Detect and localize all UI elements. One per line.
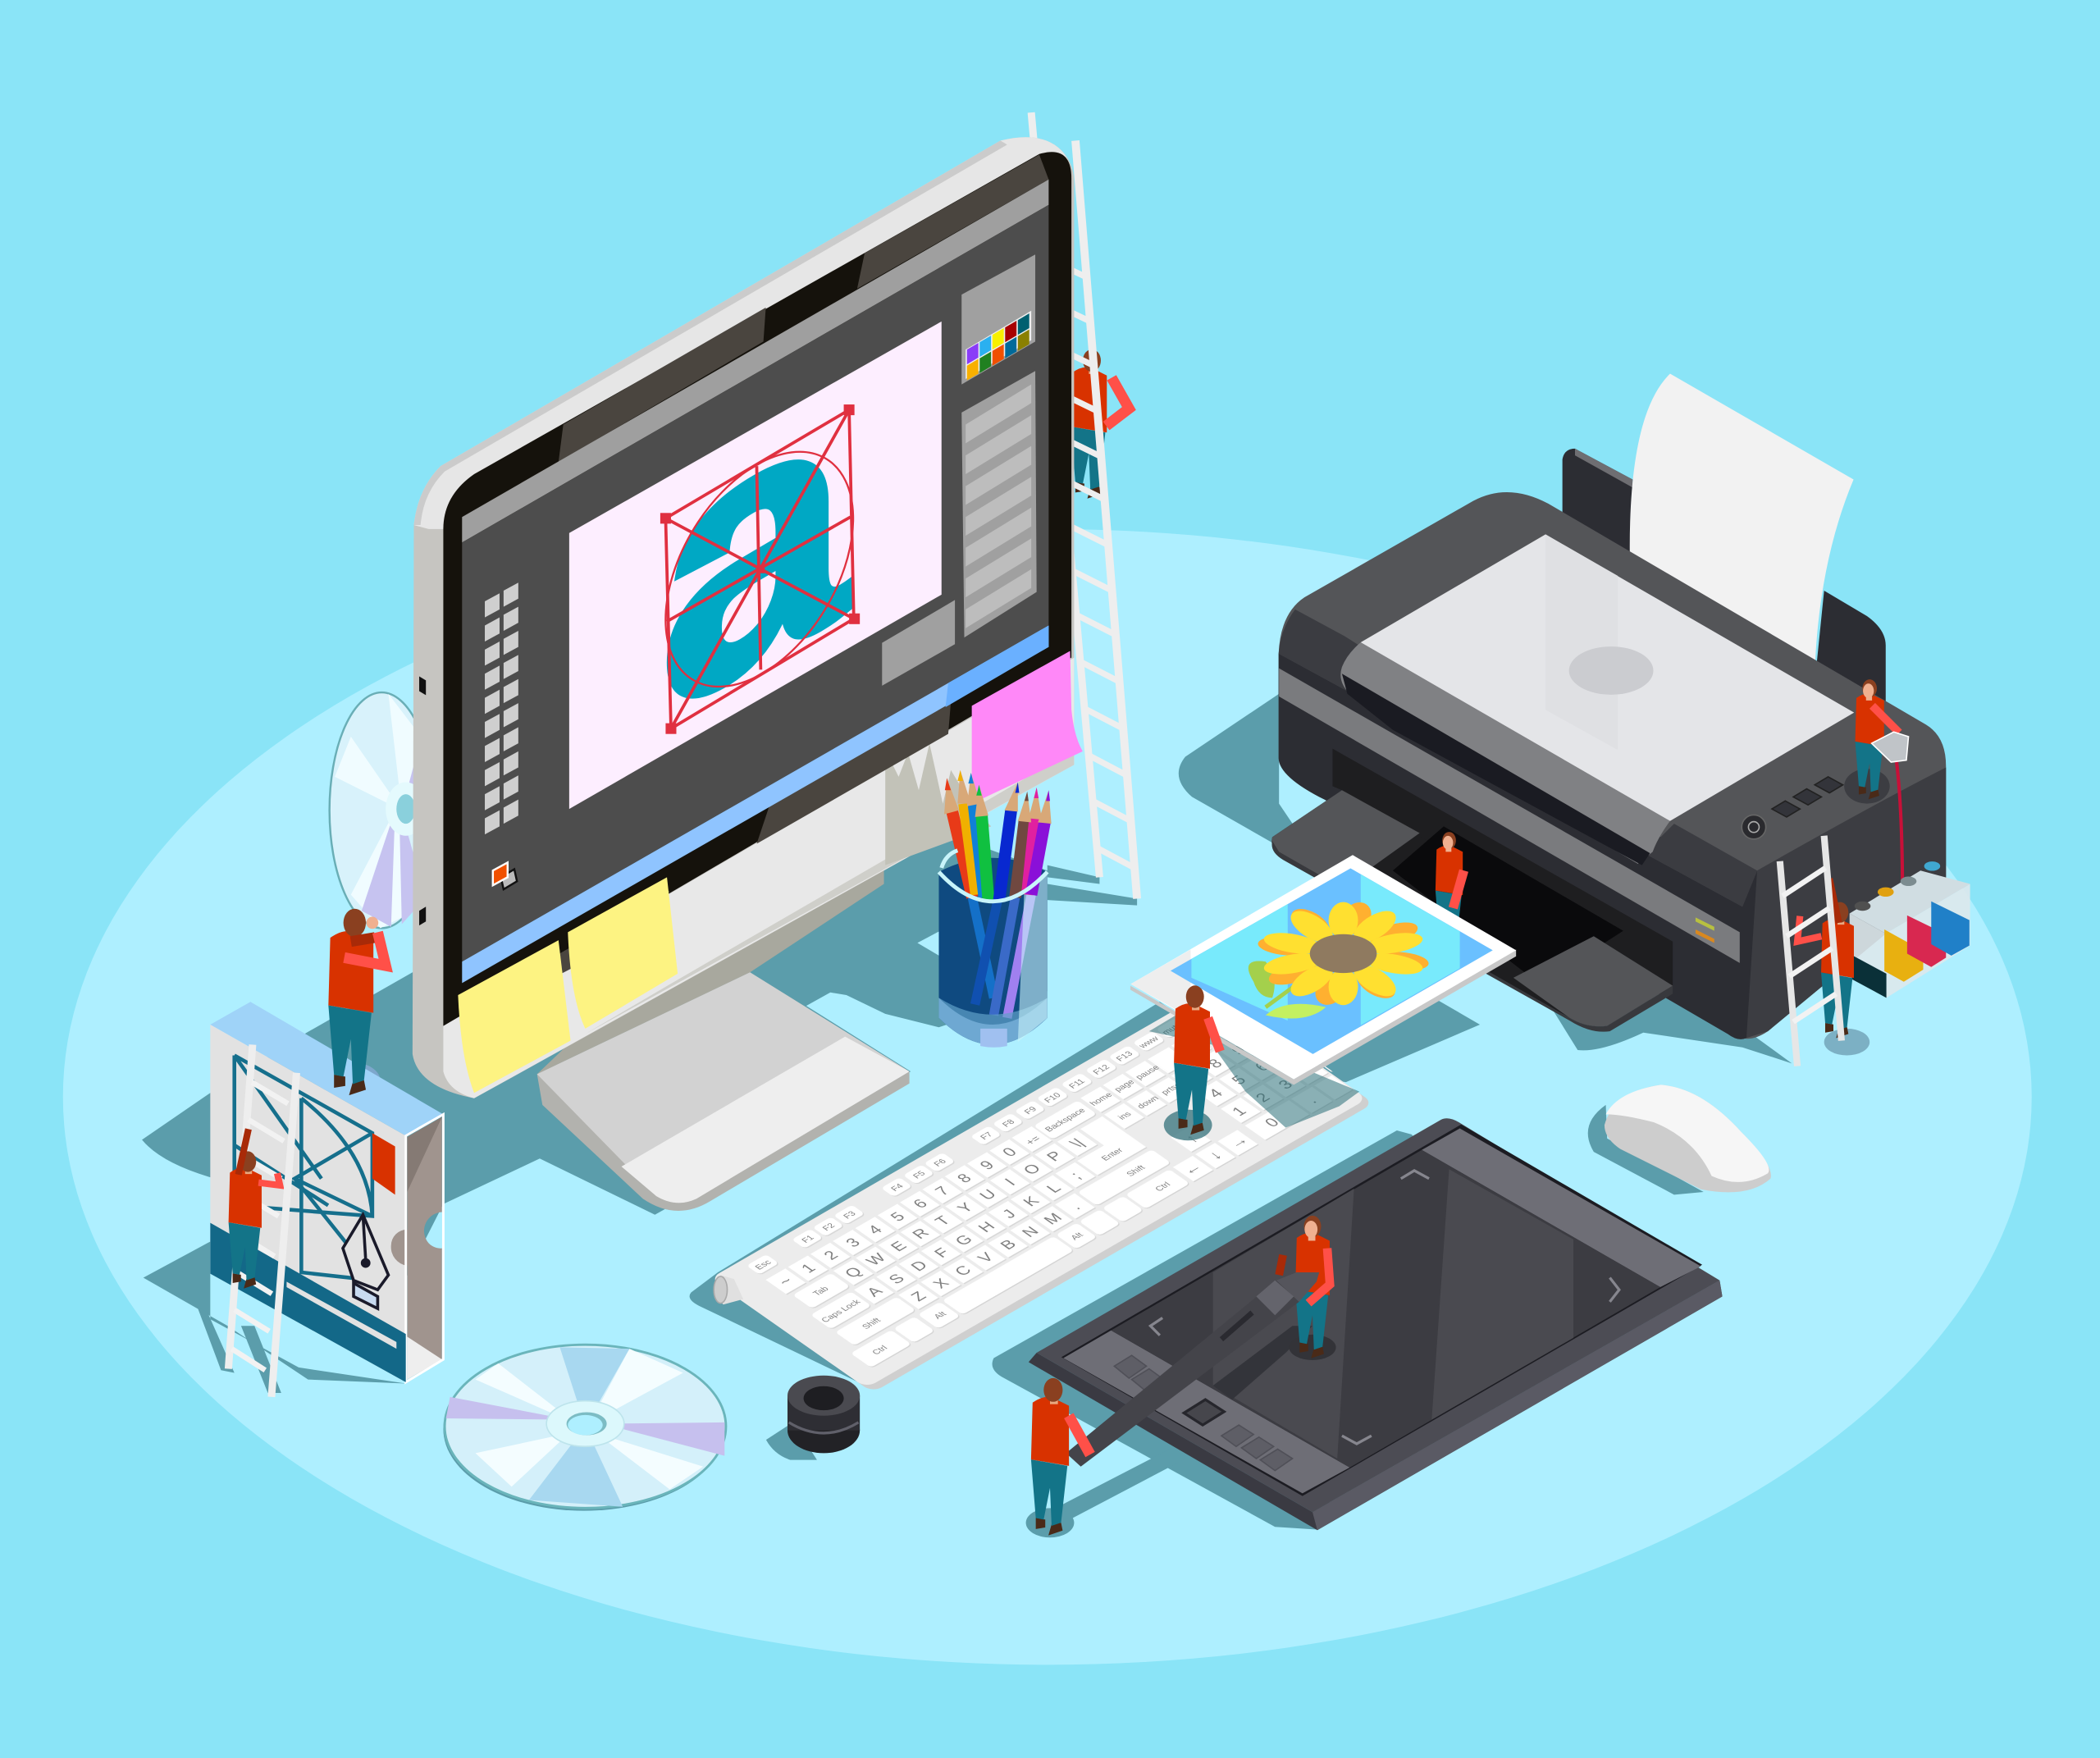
ink stream (1897, 760, 1902, 880)
pencils in cup (972, 895, 1031, 1018)
person on printer ladder (1797, 879, 1869, 1056)
key labels: prtsc (1160, 1082, 1184, 1097)
key labels (749, 1021, 1304, 1358)
paper support right (1815, 591, 1886, 710)
corner marks (1150, 1171, 1619, 1444)
output tray (1271, 790, 1673, 1026)
person standing on box (328, 909, 386, 1095)
keyboard: ↑ (1181, 1132, 1203, 1146)
stylus pen (1066, 1272, 1319, 1467)
keyboard: 9 (1227, 1043, 1250, 1057)
box stripe (210, 1223, 406, 1382)
keyboard: 4 (864, 1222, 887, 1237)
printer dark top band (1279, 610, 1757, 906)
key labels: page (1113, 1079, 1137, 1094)
keyboard: = (1303, 1066, 1319, 1076)
keyboard: V (974, 1250, 998, 1266)
lens cap (788, 1376, 860, 1453)
pen shadow on tablet (1213, 1326, 1312, 1400)
photo shadow on keyboard (1149, 1016, 1359, 1128)
tablet edge (1029, 1281, 1723, 1530)
keyboard: E (887, 1239, 911, 1254)
tablet person arms (1279, 1249, 1330, 1304)
key labels: www (1137, 1035, 1162, 1050)
keyboard: ← (1178, 1160, 1207, 1178)
disc blue reflections (529, 1347, 629, 1507)
key labels: F7 (979, 1131, 995, 1141)
right glass (1018, 872, 1048, 1042)
CD reflections (335, 694, 431, 928)
ladder rungs (1044, 257, 1134, 868)
yellow ink (1884, 929, 1923, 982)
keyboard: S (885, 1272, 909, 1287)
key labels: F11 (1067, 1078, 1088, 1090)
photo print (1130, 855, 1516, 1084)
front trim (1279, 669, 1740, 963)
side slots (419, 676, 426, 925)
key labels: Ctrl (871, 1345, 890, 1356)
pencils (952, 804, 1044, 900)
sunflower petals (1260, 902, 1427, 1005)
power button (1742, 815, 1766, 839)
key labels: mute (1161, 1021, 1185, 1037)
printer side panel (1746, 768, 1946, 1038)
keyboard: 5 (1228, 1073, 1250, 1088)
cup back (938, 858, 1048, 1044)
tablet top (1037, 1118, 1719, 1512)
key labels: Enter (1100, 1147, 1125, 1162)
pen nib icon (343, 1215, 388, 1308)
keyboard: F (930, 1245, 954, 1261)
pencil leads (945, 779, 951, 790)
printer body (1279, 492, 1946, 1039)
monitor chin (443, 658, 1074, 1098)
key labels: Alt (1070, 1231, 1085, 1242)
pencil cup (938, 770, 1052, 1048)
photo sky (1171, 868, 1493, 1054)
key labels: home (1089, 1091, 1115, 1107)
blue ink (1931, 902, 1970, 956)
desk ellipse (63, 529, 2032, 1664)
pink sticky note (972, 651, 1083, 804)
yellow sticky note 2 (568, 877, 678, 1029)
keyboard: 4 (1205, 1086, 1227, 1101)
ladder left rail (1031, 112, 1099, 877)
keyboard: B (997, 1237, 1020, 1253)
tank caps (1855, 861, 1940, 911)
key labels: Shift (1125, 1164, 1148, 1178)
key labels: Caps Lock (820, 1299, 863, 1324)
red label (372, 1133, 395, 1194)
photo leaves (1249, 961, 1275, 998)
mouse (1605, 1084, 1771, 1192)
monitor housing (413, 137, 1074, 1098)
keyboard: A (863, 1284, 887, 1299)
person at printer output (1436, 832, 1463, 945)
book box (210, 1002, 443, 1382)
keyboard: Y (953, 1200, 978, 1216)
disc white reflections (476, 1349, 703, 1489)
person lifting pen (1026, 1378, 1090, 1537)
yellow sticky note 1 (458, 940, 571, 1093)
keyboard: 0 (1261, 1115, 1284, 1130)
keyboard: ↓ (1204, 1148, 1226, 1162)
light strips (1422, 1128, 1701, 1287)
keyboard: H (975, 1219, 999, 1235)
pink ink (1907, 916, 1946, 967)
cup base (938, 998, 1048, 1034)
keyboard roll edge (714, 1275, 743, 1304)
ink bucket (1872, 732, 1909, 762)
keyboard: ~ (774, 1274, 797, 1289)
keyboard: 9 (976, 1158, 998, 1172)
keyboard: M (1040, 1211, 1066, 1227)
key labels: Esc (754, 1259, 774, 1272)
stand neck (537, 857, 884, 1074)
key labels: Ctrl (1154, 1181, 1173, 1193)
keyboard: X (929, 1276, 953, 1291)
paper support left (1563, 449, 1632, 578)
person climbing monitor ladder (1071, 349, 1129, 499)
printer front face (1279, 654, 1757, 1039)
ladder on box front rail (272, 1073, 296, 1397)
tank tops (1850, 870, 1970, 934)
tablet (1029, 1118, 1723, 1530)
keyboard: += (1022, 1134, 1043, 1147)
keyboard: K (1020, 1194, 1043, 1209)
small panel (882, 600, 955, 686)
keyboard: L (1043, 1181, 1066, 1196)
key labels: F4 (890, 1183, 906, 1193)
person holding CD base (322, 1062, 381, 1099)
app workspace (462, 205, 1048, 961)
tool palette (485, 582, 518, 834)
keyboard: . (1303, 1094, 1321, 1106)
keyboard: J (998, 1207, 1020, 1221)
keyboard: → (1224, 1133, 1253, 1151)
keyboard: ; (1066, 1170, 1085, 1182)
keyboard keys (735, 993, 1356, 1368)
keyboard: W (862, 1250, 891, 1268)
keyboard: O (1020, 1162, 1045, 1178)
key labels: F2 (821, 1222, 838, 1232)
keyboard: I (1001, 1176, 1020, 1189)
keyboard: 5 (887, 1209, 909, 1224)
swatch panel (961, 254, 1035, 385)
key labels: F9 (1023, 1106, 1039, 1116)
cup rim (938, 872, 1048, 902)
canvas (569, 322, 942, 809)
ladder at monitor (1031, 112, 1134, 877)
key labels: pause (1134, 1064, 1162, 1081)
keyboard: T (931, 1213, 955, 1229)
CD on desk (443, 1345, 726, 1511)
express keys (1114, 1355, 1293, 1471)
key labels: F5 (911, 1170, 928, 1180)
sunflower centre (1310, 934, 1376, 973)
keyboard: 3 (842, 1235, 865, 1250)
bezel reflections (472, 155, 1048, 1021)
printer (1271, 374, 1946, 1039)
key labels: F3 (842, 1210, 858, 1221)
keyboard (710, 988, 1376, 1393)
ink tanks (1850, 861, 1970, 998)
key labels: F10 (1043, 1092, 1063, 1104)
key labels: F6 (933, 1158, 949, 1168)
keyboard: 7 (931, 1184, 954, 1199)
sunflower back petals (1255, 901, 1431, 1007)
inner black line (1061, 1125, 1702, 1496)
keyboard: D (907, 1258, 932, 1274)
keyboard: 6 (910, 1197, 932, 1211)
person carrying photo on keyboard (1164, 985, 1220, 1140)
keyboard: 2 (1252, 1090, 1274, 1105)
disc lilac reflections (446, 1397, 724, 1456)
black ink (1851, 955, 1887, 998)
screen bezel (443, 152, 1071, 1026)
monitor (413, 137, 1074, 1211)
keyboard: C (951, 1263, 975, 1279)
vector frame (660, 404, 860, 734)
key labels: ins (1116, 1111, 1134, 1121)
key labels: F13 (1115, 1050, 1135, 1063)
keyboard: Z (907, 1289, 930, 1304)
key labels: F8 (1001, 1118, 1017, 1129)
key labels: Alt (933, 1311, 949, 1321)
app title bar (462, 180, 1048, 542)
key labels: F1 (801, 1235, 816, 1244)
keyboard: G (952, 1232, 977, 1249)
control buttons (1772, 777, 1843, 817)
box drawing (235, 1056, 372, 1279)
keyboard: 7 (1181, 1070, 1203, 1084)
keyboard: 2 (820, 1248, 842, 1263)
paper (1630, 374, 1854, 673)
keyboard: P (1043, 1148, 1066, 1164)
keyboard: 8 (953, 1171, 976, 1185)
person on tablet holding pen (1289, 1216, 1336, 1360)
keyboard: U (976, 1187, 1001, 1203)
desk gap behind cup (917, 931, 940, 957)
grey flatbed strip (1340, 642, 1670, 864)
indicator lights (1696, 917, 1714, 931)
box top (210, 1002, 443, 1135)
pencil wood tips (944, 770, 1052, 824)
CD behind monitor (330, 692, 434, 928)
key labels: down (1136, 1095, 1162, 1111)
ladder on box back part (228, 1044, 288, 1370)
scanner oval (1569, 646, 1654, 695)
key labels: Shift (861, 1317, 883, 1331)
key labels: Backspace (1043, 1107, 1088, 1134)
person pouring ink (1844, 679, 1909, 880)
active area (1111, 1150, 1660, 1468)
housing top rim (413, 137, 1071, 529)
stand base (537, 972, 910, 1211)
keyboard: \| (1066, 1136, 1089, 1151)
output slot (1332, 749, 1673, 998)
ladder at printer (1780, 836, 1842, 1066)
keyboard: Q (841, 1264, 866, 1281)
box front (210, 1025, 406, 1382)
key labels: Tab (811, 1285, 831, 1298)
keyboard: 3 (1275, 1077, 1297, 1092)
app blue status bar (462, 625, 1048, 983)
cast shadows (142, 694, 1792, 1529)
keyboard: 8 (1204, 1057, 1226, 1071)
box interior (391, 1117, 442, 1380)
letter a on canvas: a (660, 297, 850, 792)
keyboard: R (909, 1226, 934, 1242)
tank front glass (1850, 884, 1970, 998)
colour picker icon (493, 862, 517, 889)
keyboard: 0 (998, 1145, 1021, 1160)
keyboard: 1 (797, 1261, 819, 1276)
ladder front rail (1075, 140, 1137, 898)
person on box ladder (229, 1129, 280, 1289)
keyboard: . (1066, 1200, 1084, 1212)
keyboard: N (1018, 1224, 1043, 1240)
keyboard: 6 (1251, 1059, 1273, 1074)
keyboard: 1 (1228, 1104, 1250, 1119)
key labels: F12 (1092, 1064, 1112, 1076)
layers panel (961, 371, 1037, 637)
flatbed glass (1361, 534, 1854, 821)
